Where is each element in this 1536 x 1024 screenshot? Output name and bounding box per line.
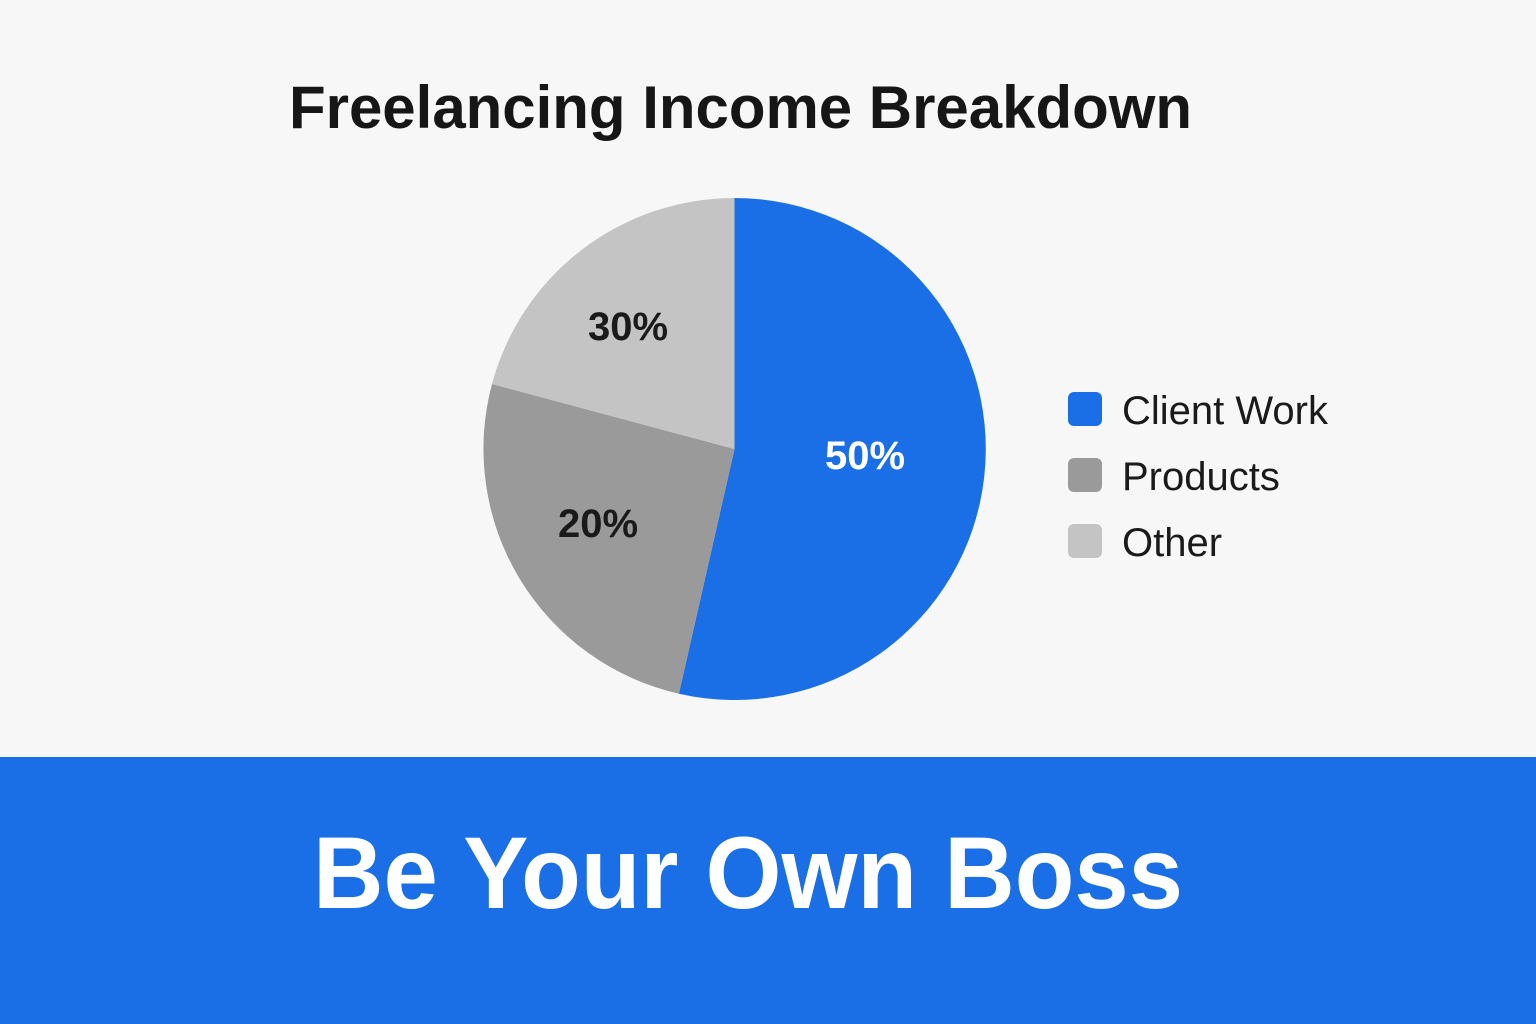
pie chart [483,198,986,700]
slice: products 20% [483,384,734,694]
label 30%: 30% [588,305,668,349]
legend: client work: Client Work [1122,389,1329,433]
legend: other [1068,521,1222,565]
banner text: Be Your Own Boss [313,816,1183,930]
label 50%: 50% [825,434,905,478]
legend [1068,389,1329,565]
banner [0,757,1536,1024]
legend: other: Other [1122,521,1222,565]
slice: client work 50% [679,198,986,700]
legend: products: Products [1122,455,1280,499]
title: Freelancing Income Breakdown [289,74,1192,141]
slice: other 30% [492,198,734,449]
label 20%: 20% [558,502,638,546]
